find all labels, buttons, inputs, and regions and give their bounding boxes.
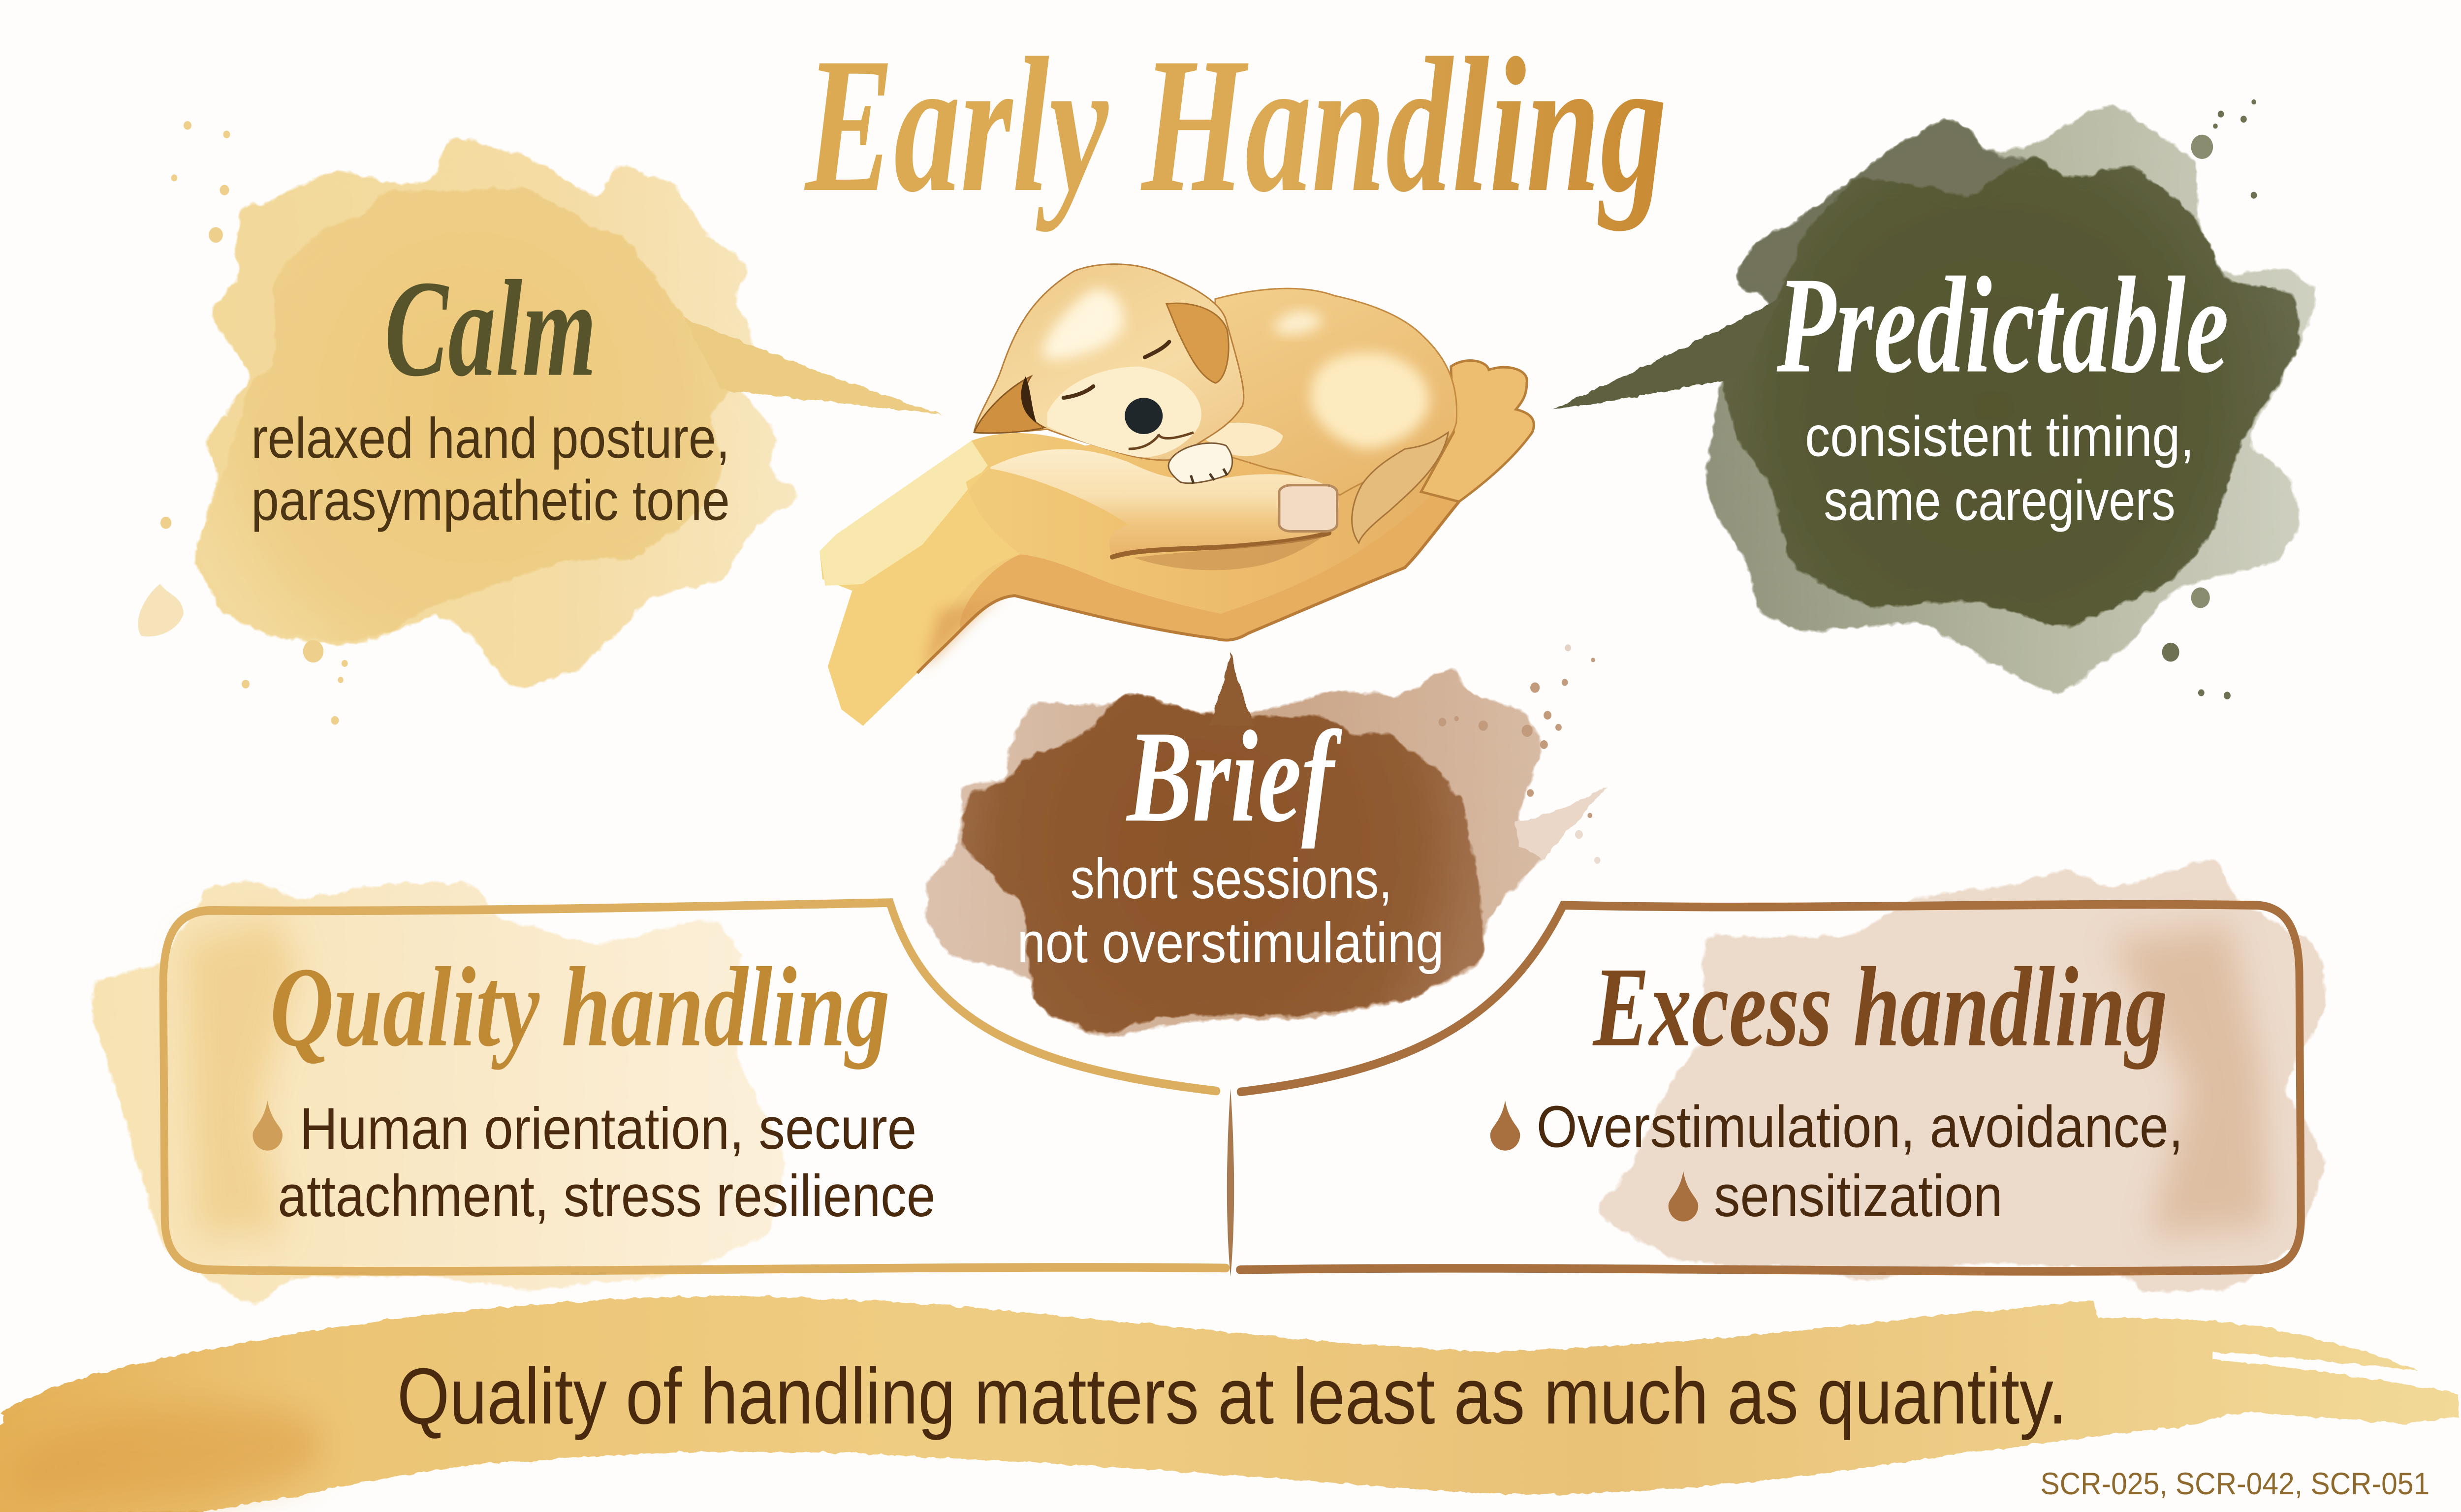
banner bbox=[0, 1296, 2458, 1512]
banner: wash bbox=[0, 1296, 2458, 1512]
puppy: claws bbox=[1191, 469, 1227, 483]
text: quality line 1: Human orientation, secure bbox=[300, 1096, 916, 1162]
body: brief line 1: short sessions, bbox=[1071, 848, 1392, 911]
splatter: calm bbox=[138, 121, 348, 724]
body: brief line 2: not overstimulating bbox=[1017, 911, 1444, 975]
icon: drop bbox=[1490, 1101, 1520, 1151]
hand bbox=[820, 361, 1534, 726]
banner text: Quality of handling matters at least as much as quantity. bbox=[397, 1352, 2067, 1441]
hand: wrist shadow bbox=[923, 594, 1015, 670]
panel: quality handling bbox=[90, 880, 1226, 1308]
quality: wash bbox=[90, 880, 787, 1308]
heading: predictable: Predictable bbox=[1775, 249, 2229, 402]
puppy: nose bbox=[1125, 398, 1163, 434]
puppy: paw bbox=[1168, 443, 1232, 483]
puppy: haunch bbox=[1310, 352, 1429, 449]
panel: predictable blob bbox=[1553, 99, 2320, 699]
body: calm line 1: relaxed hand posture, bbox=[251, 407, 730, 470]
hand: fingers bbox=[1421, 361, 1534, 502]
panel: brief blob bbox=[926, 644, 1607, 1039]
heading: quality handling: Quality handling bbox=[270, 944, 890, 1070]
calm: inner wash bbox=[196, 189, 734, 643]
hand: bottom edge bbox=[917, 502, 1459, 673]
calm: pointer bbox=[684, 318, 942, 414]
puppy: head bbox=[974, 264, 1244, 460]
splatter: brief bbox=[1439, 644, 1601, 864]
thumb: shadow bbox=[1134, 536, 1324, 570]
puppy: chest bbox=[1194, 423, 1283, 456]
puppy: left ear bbox=[974, 377, 1044, 433]
puppy: muzzle bbox=[1047, 367, 1201, 457]
text: excess line 1: Overstimulation, avoidance, bbox=[1537, 1095, 2183, 1160]
callout text: predictable bbox=[1775, 249, 2229, 533]
excess: wash bbox=[1593, 855, 2328, 1292]
predictable: pointer bbox=[1553, 297, 1781, 410]
heading: brief: Brief bbox=[1126, 704, 1343, 850]
callout text: brief bbox=[1017, 704, 1444, 975]
hand: pale wrist bbox=[820, 441, 988, 586]
excess: darker stain bbox=[2111, 924, 2268, 1235]
frame: excess bbox=[1240, 905, 2301, 1271]
panel: calm blob bbox=[138, 121, 942, 724]
puppy: forehead blaze bbox=[1042, 289, 1124, 360]
illustration: puppy in hand bbox=[820, 264, 1534, 726]
icon: drop bbox=[252, 1101, 283, 1151]
puppy: body bbox=[1215, 288, 1457, 495]
hand: lower band bbox=[960, 416, 1534, 640]
thumb: nail bbox=[1279, 485, 1337, 532]
source references: SCR-025, SCR-042, SCR-051 bbox=[2040, 1466, 2429, 1501]
frame: quality bbox=[163, 903, 1226, 1271]
divider: centre spindle bbox=[1227, 1088, 1234, 1277]
panel: excess handling bbox=[1240, 855, 2328, 1292]
body: predictable line 2: same caregivers bbox=[1824, 469, 2176, 533]
hand: yellow forearm bbox=[828, 469, 1020, 726]
brief: streak bbox=[1514, 786, 1607, 858]
puppy: back highlight bbox=[1272, 311, 1324, 334]
title: Early Handling bbox=[803, 18, 1667, 232]
callout text: calm bbox=[251, 252, 730, 533]
icon: drop bbox=[1669, 1171, 1698, 1222]
puppy: eyes bbox=[1064, 342, 1169, 398]
body: predictable line 1: consistent timing, bbox=[1805, 405, 2194, 469]
predictable: dark wash bbox=[1720, 154, 2301, 629]
puppy: tail bbox=[1352, 433, 1448, 543]
text: excess line 2: sensitization bbox=[1714, 1164, 2003, 1229]
heading: calm: Calm bbox=[384, 252, 597, 405]
hand: thumb bbox=[990, 449, 1339, 556]
splatter: predictable bbox=[2162, 99, 2257, 699]
quality: darker stain bbox=[185, 915, 298, 1235]
brief: dark wash bbox=[962, 691, 1483, 1035]
body: calm line 2: parasympathetic tone bbox=[251, 469, 730, 533]
banner: dark wash bbox=[16, 1407, 323, 1500]
banner: edge patch bbox=[0, 1396, 204, 1512]
heading: excess handling: Excess handling bbox=[1592, 944, 2168, 1070]
puppy: ear shadow bbox=[1021, 377, 1037, 423]
puppy: right ear bbox=[1167, 303, 1229, 383]
brief: pointer bbox=[1208, 652, 1254, 725]
thumb: crease bbox=[1112, 533, 1329, 557]
brief: pale outer wash bbox=[926, 662, 1549, 1039]
puppy: mouth bbox=[1129, 433, 1194, 449]
predictable: olive upper-left ring bbox=[1720, 118, 2040, 518]
text: quality line 2: attachment, stress resilience bbox=[278, 1164, 936, 1229]
calm: outer wash bbox=[193, 135, 805, 691]
predictable: pale outer wash bbox=[1704, 104, 2320, 696]
